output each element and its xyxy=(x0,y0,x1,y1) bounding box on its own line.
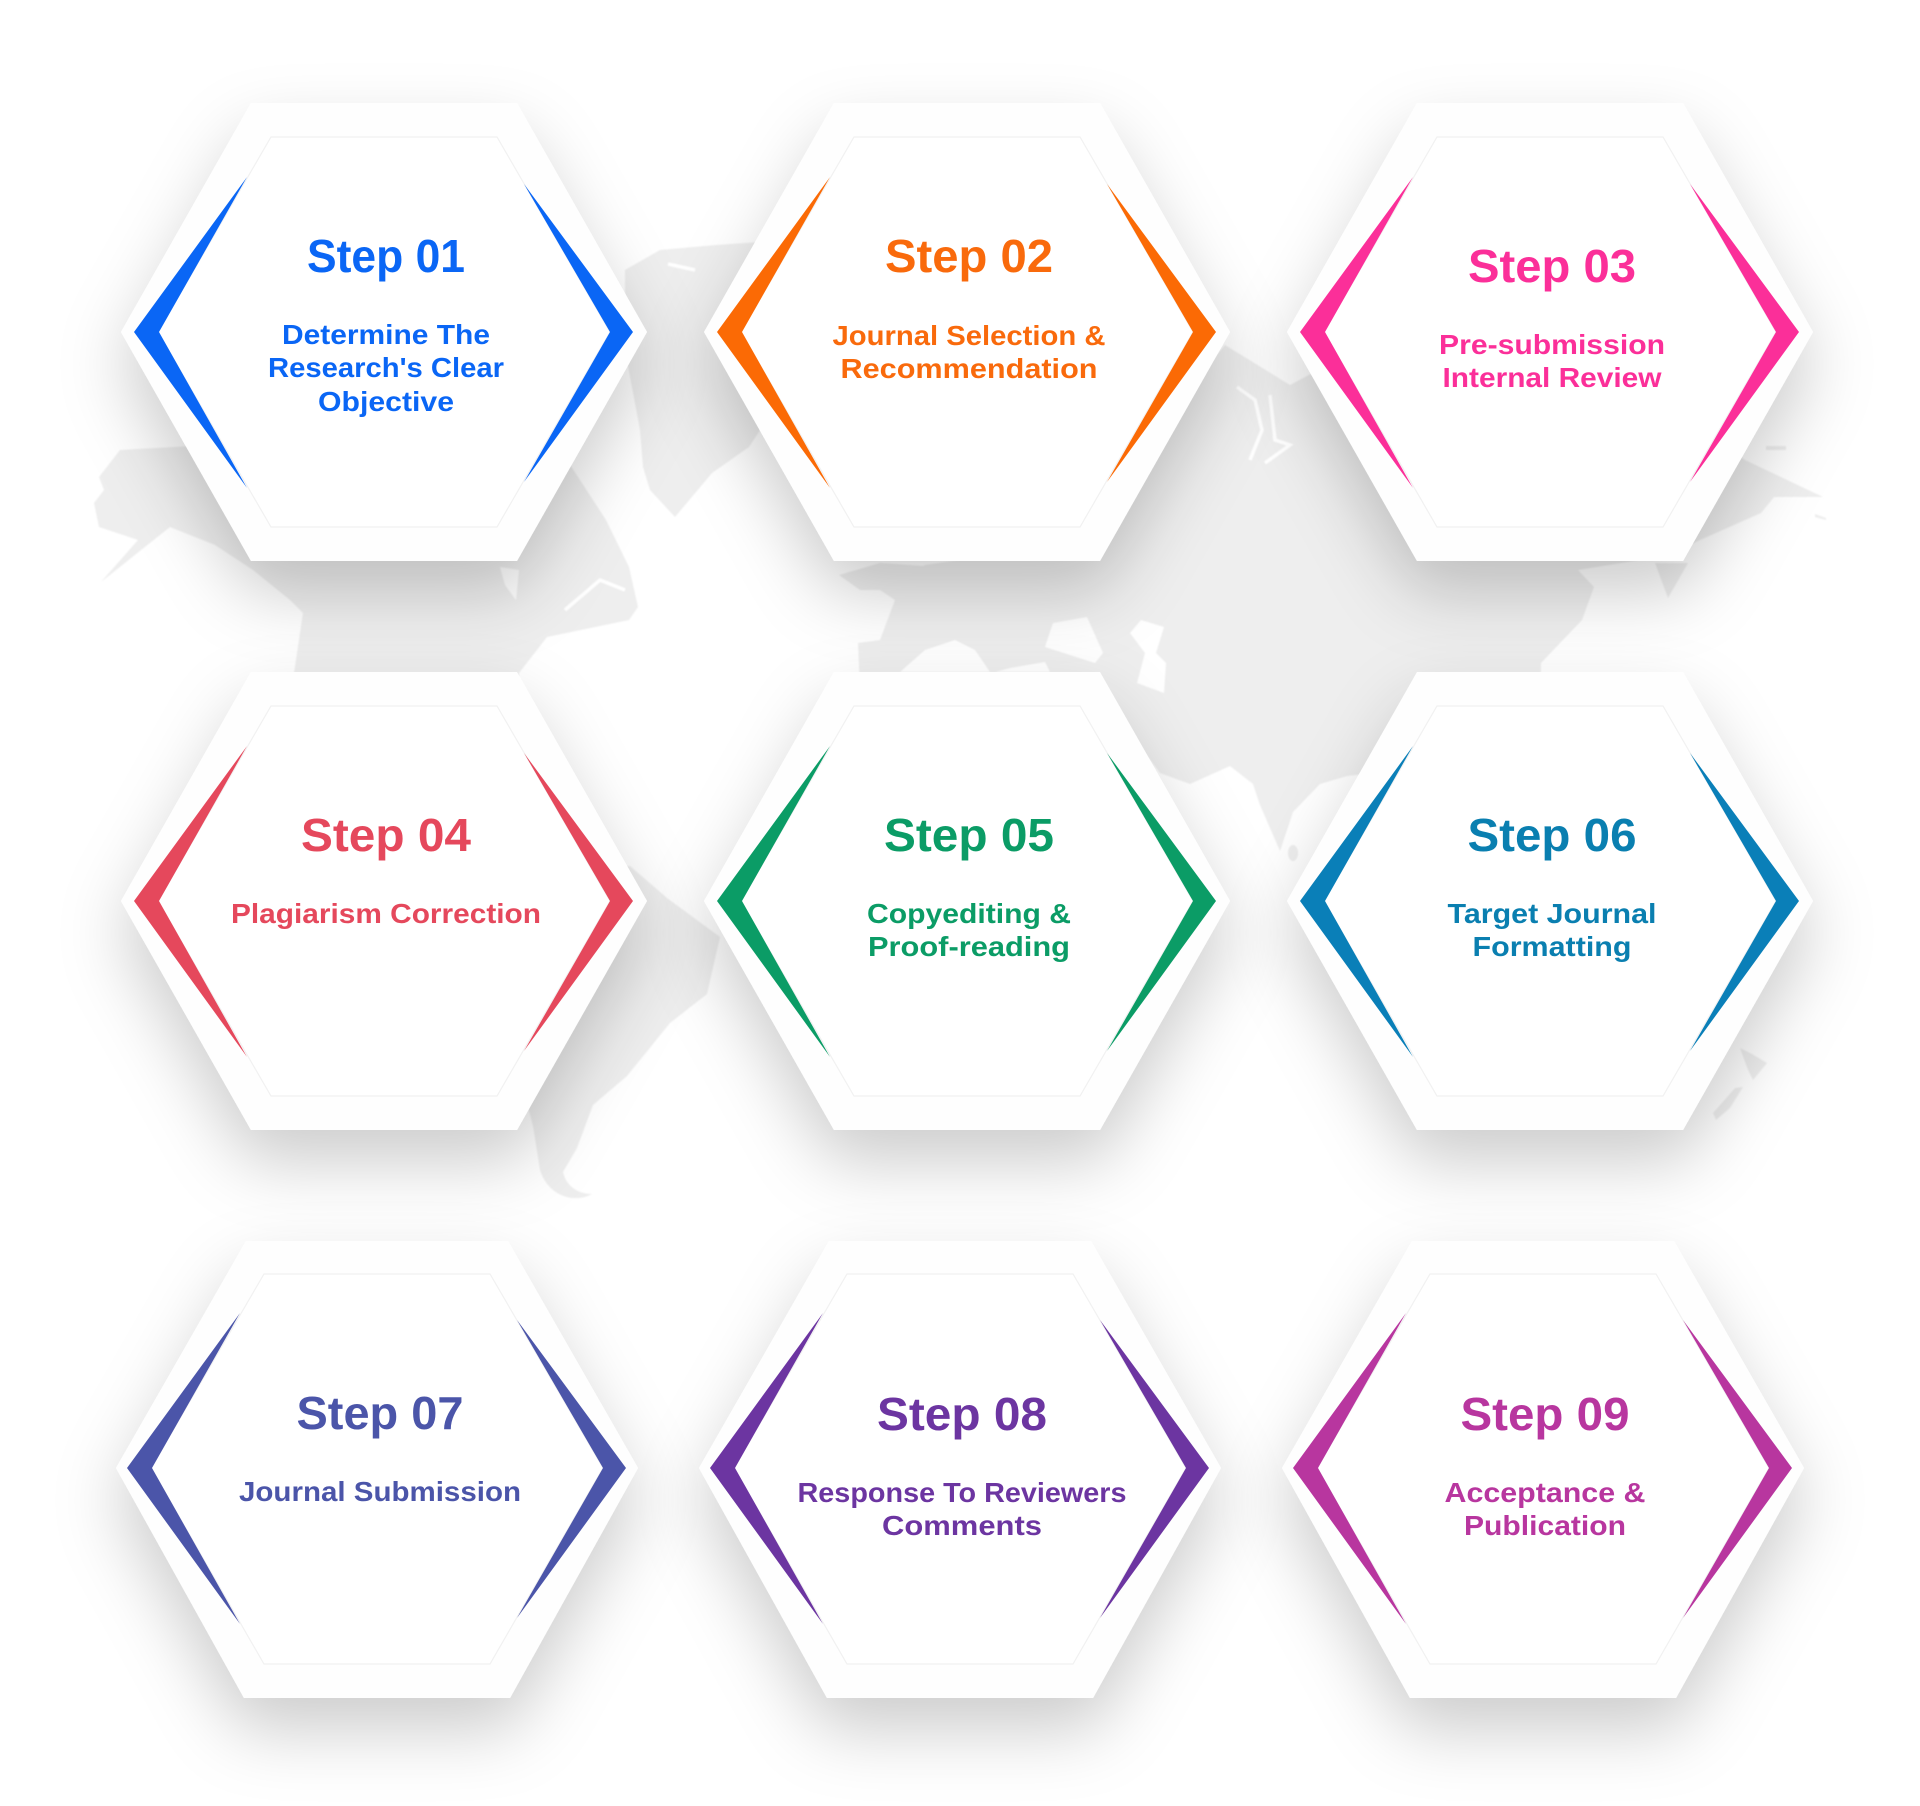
map: South America xyxy=(500,866,720,1198)
description: Target Journal xyxy=(1448,898,1656,929)
heading: Step 06 xyxy=(1468,809,1636,861)
description: Proof-reading xyxy=(868,931,1070,962)
hexagon frame xyxy=(1287,672,1813,1130)
map: Greenland xyxy=(625,240,800,517)
map: Iceland and British Isles xyxy=(839,563,923,590)
right chevron xyxy=(517,1320,626,1618)
map: Siberian islands xyxy=(1766,446,1786,450)
panel: Step 07 xyxy=(116,1241,638,1698)
map: Sri Lanka xyxy=(1288,845,1298,861)
map: New Zealand north island xyxy=(1740,1048,1767,1080)
description: Pre-submission xyxy=(1439,329,1665,360)
left chevron xyxy=(717,746,830,1057)
heading: Step 05 xyxy=(884,809,1054,861)
map: Africa xyxy=(850,690,1130,1010)
description: Journal Selection & xyxy=(832,320,1106,351)
Black Sea xyxy=(1045,617,1103,663)
panel: Step 05 xyxy=(704,672,1230,1130)
hexagon inner xyxy=(741,706,1193,1096)
hexagon inner xyxy=(158,137,610,527)
heading: Step 07 xyxy=(296,1387,464,1439)
description xyxy=(867,898,1071,962)
panel: Step 04 xyxy=(121,672,647,1130)
right chevron xyxy=(1690,184,1799,482)
panel: Step 03 xyxy=(1287,103,1813,561)
Caspian Sea xyxy=(1130,620,1166,693)
description: Acceptance & xyxy=(1444,1477,1646,1508)
map: Bering island xyxy=(1815,514,1826,520)
hexagon frame xyxy=(1282,1241,1804,1698)
description: Comments xyxy=(882,1510,1042,1541)
map: coastal inlets xyxy=(565,264,1290,610)
left chevron xyxy=(1293,1313,1406,1624)
right chevron xyxy=(1100,1320,1209,1618)
right chevron xyxy=(524,753,633,1051)
heading: Step 09 xyxy=(1460,1388,1630,1440)
map: New Zealand south island xyxy=(1713,1087,1743,1120)
heading: Step 04 xyxy=(301,809,471,861)
Eastern Mediterranean xyxy=(995,662,1050,672)
panel: Step 09 xyxy=(1282,1241,1804,1698)
heading: Step 02 xyxy=(885,230,1053,282)
description: Journal Submission xyxy=(239,1476,521,1507)
left chevron xyxy=(127,1313,240,1624)
hexagon frame xyxy=(699,1241,1221,1698)
description: Objective xyxy=(318,386,454,417)
hexagon frame xyxy=(704,103,1230,561)
left chevron xyxy=(1300,746,1413,1057)
hexagon inner xyxy=(151,1274,603,1664)
right chevron xyxy=(524,184,633,482)
left chevron xyxy=(1300,177,1413,488)
description xyxy=(832,320,1106,384)
hexagon inner xyxy=(741,137,1193,527)
description: Internal Review xyxy=(1442,362,1662,393)
description: Response To Reviewers xyxy=(798,1477,1126,1508)
hexagon frame xyxy=(121,672,647,1130)
map: inland seas xyxy=(500,567,1606,693)
description: Copyediting & xyxy=(867,898,1071,929)
hexagon inner xyxy=(1324,706,1776,1096)
hexagon inner xyxy=(734,1274,1186,1664)
hexagon inner xyxy=(1324,137,1776,527)
Greenland notch xyxy=(668,264,695,270)
Sea of Japan xyxy=(1582,647,1606,670)
left chevron xyxy=(134,746,247,1057)
Arctic gulf one xyxy=(1237,387,1262,460)
left chevron xyxy=(710,1313,823,1624)
map: Kamchatka xyxy=(1655,563,1688,598)
hexagon frame xyxy=(1287,103,1813,561)
description: Recommendation xyxy=(840,353,1098,384)
right chevron xyxy=(1690,753,1799,1051)
right chevron xyxy=(1107,753,1216,1051)
description: Research's Clear xyxy=(268,352,504,383)
map: North America xyxy=(94,440,638,870)
panel: Step 02 xyxy=(704,103,1230,561)
hexagon inner xyxy=(1317,1274,1769,1664)
description: Plagiarism Correction xyxy=(231,898,541,929)
map: land masses xyxy=(94,240,1826,1198)
hexagon frame xyxy=(121,103,647,561)
Mediterranean Sea xyxy=(900,640,990,672)
description: Publication xyxy=(1464,1510,1626,1541)
map: Eurasia xyxy=(858,300,1823,851)
description: Formatting xyxy=(1472,931,1632,962)
left chevron xyxy=(134,177,247,488)
Gulf of St Lawrence xyxy=(565,580,625,610)
description xyxy=(1439,329,1665,393)
heading: Step 01 xyxy=(307,230,465,282)
heading: Step 03 xyxy=(1468,240,1636,292)
hexagon frame xyxy=(704,672,1230,1130)
panel: Step 08 xyxy=(699,1241,1221,1698)
right chevron xyxy=(1683,1320,1792,1618)
background world map xyxy=(94,240,1826,1198)
description xyxy=(1448,898,1656,962)
hexagon inner xyxy=(158,706,610,1096)
hexagon frame xyxy=(116,1241,638,1698)
description xyxy=(1444,1477,1646,1541)
description xyxy=(268,319,504,417)
heading: Step 08 xyxy=(877,1388,1047,1440)
panel: Step 06 xyxy=(1287,672,1813,1130)
left chevron xyxy=(717,177,830,488)
right chevron xyxy=(1107,184,1216,482)
Arctic gulf two xyxy=(1265,395,1290,463)
Hudson Bay xyxy=(500,567,519,600)
description xyxy=(798,1477,1126,1541)
description: Determine The xyxy=(282,319,490,350)
panel: Step 01 xyxy=(121,103,647,561)
